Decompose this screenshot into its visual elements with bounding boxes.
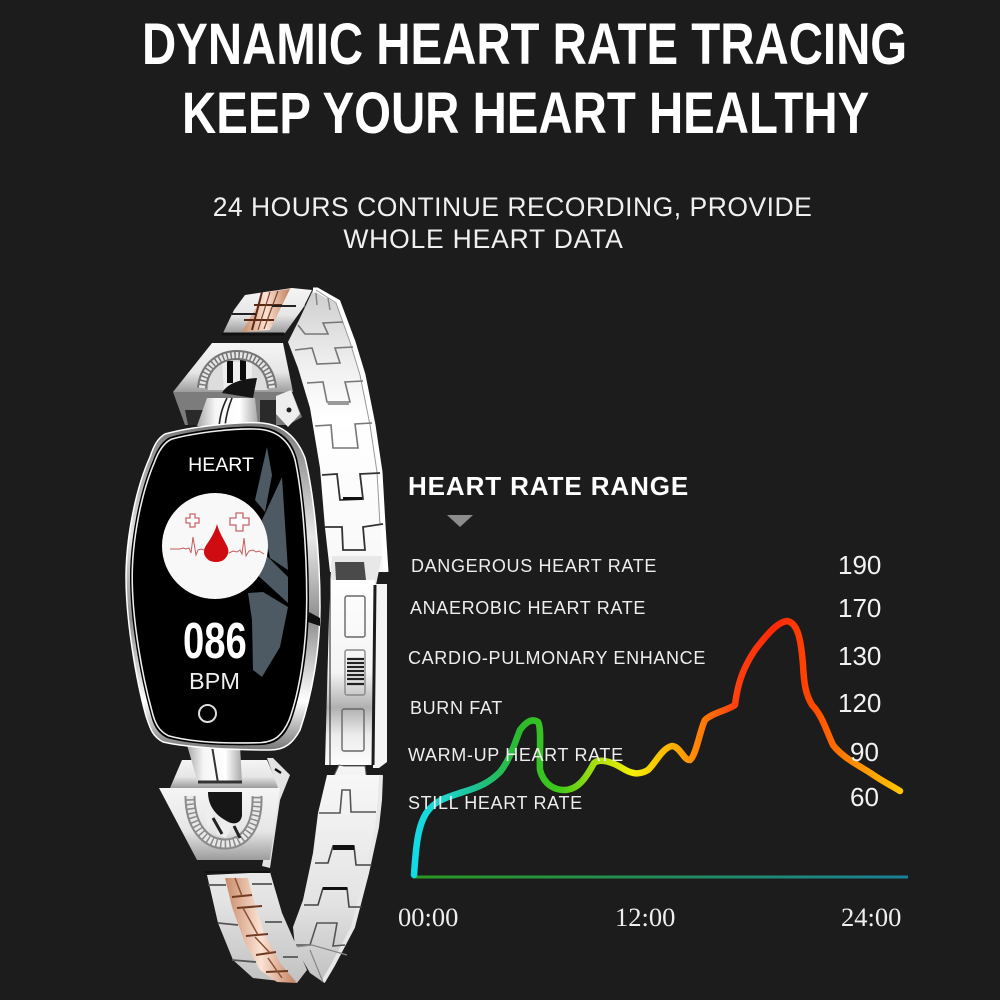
zone labels: WARM-UP HEART RATE (408, 745, 624, 765)
watch band: lower links (205, 872, 307, 983)
heart rate curve (413, 621, 908, 877)
chart heading: HEART RATE RANGE (408, 471, 689, 501)
upper lug with rhinestone arch (173, 343, 302, 427)
down arrow (447, 515, 473, 527)
zone labels: STILL HEART RATE (408, 793, 583, 813)
watch case (126, 423, 320, 750)
zone labels (408, 556, 706, 813)
zone values (838, 550, 881, 812)
zone labels: CARDIO-PULMONARY ENHANCE (408, 648, 706, 668)
home button (198, 704, 217, 723)
time axis labels (398, 902, 901, 932)
zone values: 190 (838, 550, 881, 580)
title: KEEP YOUR HEART HEALTHY (182, 81, 869, 146)
time axis labels: 24:00 (841, 902, 901, 932)
unit label: BPM (189, 668, 240, 694)
time axis labels: 00:00 (398, 902, 458, 932)
subtitle (213, 192, 812, 254)
heart icon disc (162, 493, 268, 599)
lower lug with rhinestone arch (159, 745, 290, 868)
watch band: upper left links (222, 288, 312, 334)
watch band: right lower strap (293, 775, 381, 982)
watch band: centre clasp (325, 556, 387, 790)
zone values: 60 (850, 782, 879, 812)
title (142, 12, 907, 146)
zone values: 170 (838, 593, 881, 623)
time axis labels: 12:00 (615, 902, 675, 932)
zone values: 120 (838, 688, 881, 718)
zone labels: BURN FAT (410, 698, 503, 718)
watch screen labels: HEART (188, 454, 254, 476)
screen reflection (248, 447, 288, 677)
watch band: right upper strap (288, 290, 386, 572)
heart rate value: 086 (183, 612, 247, 669)
zone labels: ANAEROBIC HEART RATE (410, 598, 646, 618)
zone values: 130 (838, 641, 881, 671)
subtitle: 24 HOURS CONTINUE RECORDING, PROVIDE (213, 192, 812, 222)
zone values: 90 (850, 737, 879, 767)
subtitle: WHOLE HEART DATA (343, 224, 624, 254)
zone labels: DANGEROUS HEART RATE (411, 556, 657, 576)
title: DYNAMIC HEART RATE TRACING (142, 12, 907, 77)
